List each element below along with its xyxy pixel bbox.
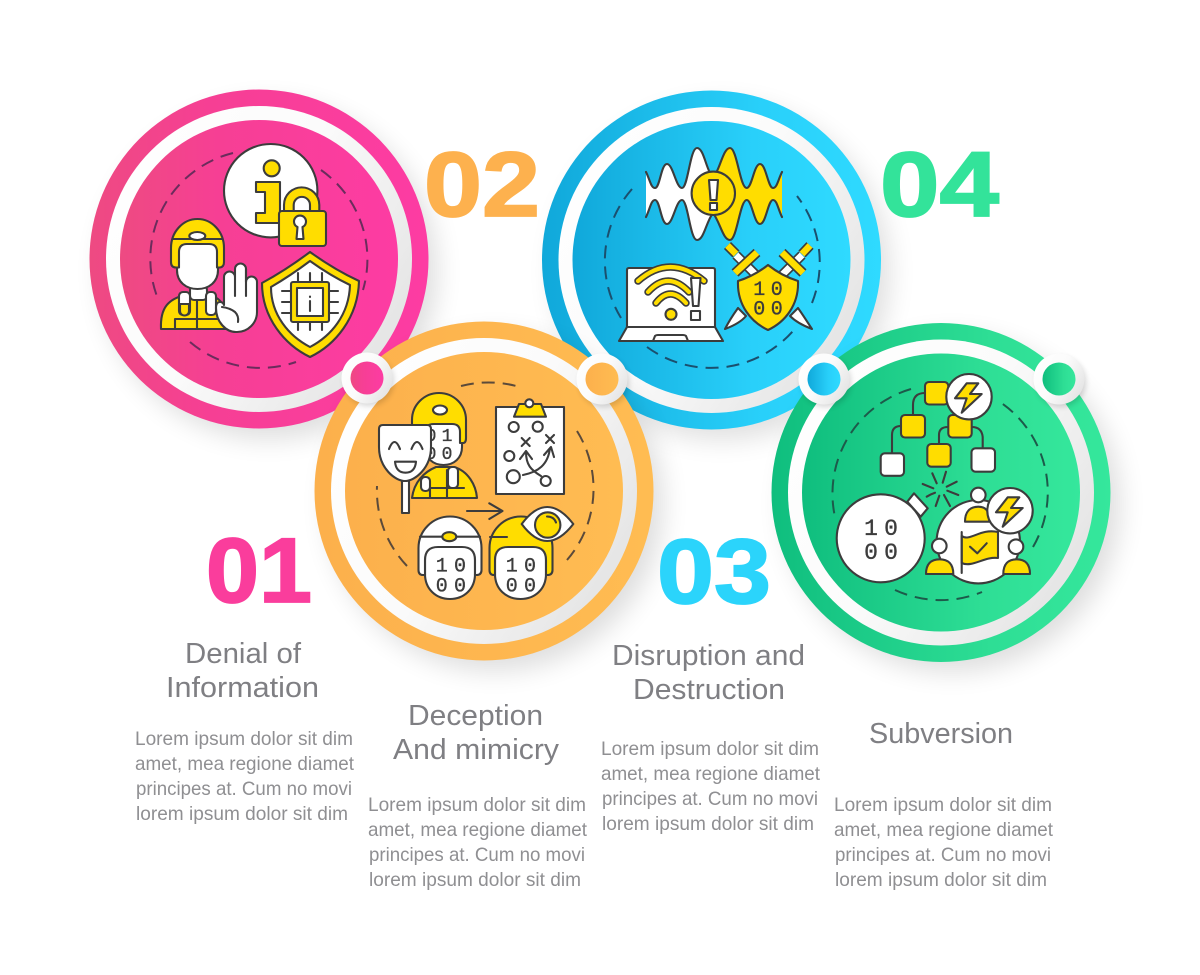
icon: laptop with wifi warning [619, 267, 723, 341]
arrow between heads [467, 503, 502, 519]
number 02: 02 [424, 134, 540, 236]
text block: 03 description: Lorem ipsum dolor sit dim [601, 738, 819, 760]
icon: white helmet head with binary face: 0 [454, 576, 466, 599]
heading: denial of information: Information [166, 672, 319, 704]
text block: 03 description [601, 738, 821, 835]
icon: yellow helmet head with eye: 0 [524, 556, 536, 579]
heading: deception and mimicry: Deception [408, 700, 543, 732]
icon: soldier with mask: 0 [426, 427, 436, 447]
binary digits on shield [753, 279, 783, 321]
text block: 02 description [368, 794, 588, 891]
text block: 01 description: Lorem ipsum dolor sit dim [135, 728, 353, 750]
icon: tactics clipboard [496, 399, 564, 494]
dashed ring: pink [150, 153, 367, 368]
icon: crossed swords and binary shield [725, 246, 812, 330]
icon: soldier with mask: 0 [442, 445, 452, 465]
binary digits on bomb: 0 [864, 540, 878, 566]
icon: binary bomb with sparks [837, 472, 958, 582]
icon: yellow helmet head with eye: 1 [506, 556, 518, 579]
icon: team with flag and lightning [926, 488, 1033, 583]
connector dot: green [1034, 354, 1086, 407]
text block: 04 description: Lorem ipsum dolor sit dim [834, 794, 1052, 816]
icon: white helmet head with binary face: 0 [454, 556, 466, 579]
binary digits on shield: 1 [753, 279, 765, 302]
icon: hierarchy tree with lightning [881, 374, 995, 476]
dashed ring: orange [377, 382, 594, 566]
panel: 04 subversion circle [772, 323, 1120, 672]
text block: 01 description: principes at. Cum no movi [136, 778, 352, 800]
text block: 02 description: amet, mea regione diamet [368, 819, 588, 841]
panel: 01 denial of information circle [90, 90, 437, 439]
icon: white helmet head with binary face [418, 516, 482, 599]
icon: soldier with mask: 1 [442, 427, 452, 447]
number 03: 03 [657, 521, 771, 623]
text block: 02 description: lorem ipsum dolor sit dim [369, 869, 581, 891]
icon: shield with chip [262, 252, 359, 357]
binary digits on shield: 0 [771, 298, 783, 321]
connector dot: orange [576, 354, 629, 407]
heading: disruption and destruction: Destruction [633, 674, 785, 706]
panel: 03 disruption and destruction circle [542, 90, 890, 440]
binary digits on bomb: 0 [884, 516, 898, 542]
text block: 04 description: amet, mea regione diamet [834, 819, 1054, 841]
icon: soldier with stop hand [161, 219, 257, 332]
binary digits on shield: 0 [771, 279, 783, 302]
binary digits on bomb [864, 516, 898, 566]
heading: deception and mimicry [393, 700, 560, 766]
text block: 03 description: amet, mea regione diamet [601, 763, 821, 785]
heading: deception and mimicry: And mimicry [393, 734, 560, 766]
text block: 04 description [834, 794, 1054, 891]
number 04: 04 [880, 134, 999, 236]
text block: 04 description: lorem ipsum dolor sit dim [835, 869, 1047, 891]
text block: 02 description: principes at. Cum no movi [369, 844, 585, 866]
heading: denial of information [166, 638, 319, 704]
icon: soldier with mask [379, 393, 477, 513]
text block: 02 description: Lorem ipsum dolor sit dim [368, 794, 586, 816]
heading: disruption and destruction [612, 640, 805, 706]
text block: 01 description: amet, mea regione diamet [135, 753, 355, 775]
number 01: 01 [206, 520, 312, 622]
panel: 02 deception and mimicry circle [314, 322, 663, 671]
icon: white helmet head with binary face: 0 [436, 576, 448, 599]
text block: 04 description: principes at. Cum no movi [835, 844, 1051, 866]
dashed ring: blue [605, 189, 820, 368]
heading: denial of information: Denial of [185, 638, 302, 670]
icon: yellow helmet head with eye [490, 507, 573, 599]
dashed ring: green [832, 389, 1048, 600]
heading: disruption and destruction: Disruption and [612, 640, 805, 672]
binary digits on bomb: 1 [864, 516, 878, 542]
text block: 03 description: lorem ipsum dolor sit dim [602, 813, 814, 835]
icon: sound wave with alert [646, 148, 782, 240]
icon: white helmet head with binary face: 1 [436, 556, 448, 579]
text block: 01 description: lorem ipsum dolor sit dim [136, 803, 348, 825]
icon: yellow helmet head with eye: 0 [524, 576, 536, 599]
connector dot: pink [342, 352, 394, 406]
text block: 03 description: principes at. Cum no movi [602, 788, 818, 810]
connector dot: blue [798, 354, 851, 407]
binary digits on bomb: 0 [884, 540, 898, 566]
icon: yellow helmet head with eye: 0 [506, 576, 518, 599]
icon: information with padlock [224, 144, 326, 246]
text block: 01 description [135, 728, 355, 825]
heading: subversion: Subversion [869, 718, 1013, 750]
icon: soldier with mask: 0 [426, 445, 436, 465]
binary digits on shield: 0 [753, 298, 765, 321]
